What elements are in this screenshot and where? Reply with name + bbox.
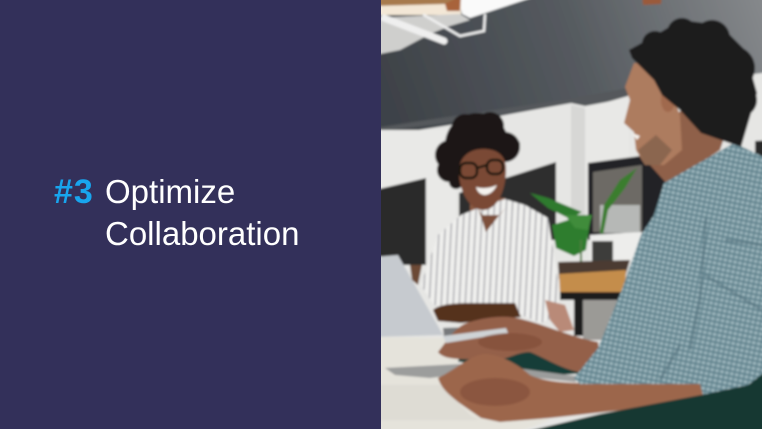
- man: shirt folds: [660, 218, 762, 380]
- photo: two colleagues talking in an office: [375, 0, 762, 429]
- man: smile: [632, 133, 640, 140]
- woman: forearm: [433, 303, 521, 323]
- woman: smile: [476, 185, 497, 195]
- tablet: [385, 363, 576, 382]
- man: curly hair: [629, 18, 757, 147]
- wall pillars: [381, 100, 608, 216]
- laptop: [381, 253, 460, 338]
- windows: [375, 140, 762, 265]
- man: lower forearm and hand: [437, 357, 629, 424]
- man: face: [624, 63, 682, 165]
- panel: navy background: [0, 0, 381, 429]
- man: lower forearm over cuff edge: [580, 382, 704, 398]
- man: knuckle shadows: [460, 333, 542, 406]
- ceiling beam shadow: [375, 88, 628, 132]
- woman: striped shirt: [421, 199, 559, 323]
- man: [438, 18, 762, 422]
- woman: hair: [435, 112, 520, 189]
- heading: #3 Optimize Collaboration: [54, 173, 299, 252]
- acoustic foam: [375, 14, 470, 55]
- man: checked shirt: [574, 143, 762, 405]
- man: ear: [661, 96, 674, 112]
- green sofa back: [457, 350, 580, 376]
- heading line two: Collaboration: [105, 215, 299, 252]
- man: pen: [443, 328, 508, 343]
- woman: [421, 112, 574, 332]
- man: upper forearm and hand: [438, 317, 601, 372]
- man: neck: [650, 109, 724, 183]
- woman: glasses: [460, 160, 503, 178]
- table: [410, 260, 630, 340]
- white trousers: [375, 337, 550, 429]
- woman: face: [459, 149, 506, 210]
- plant: [530, 168, 637, 264]
- skylight: [458, 0, 540, 18]
- heading line one: Optimize: [105, 173, 235, 210]
- heading number: #3: [54, 173, 94, 211]
- office wall: [381, 71, 762, 429]
- white box behind table: [588, 230, 644, 242]
- woman: neckline: [478, 208, 505, 232]
- ceiling light fixture: [375, 0, 662, 15]
- ceiling pipes: [384, 15, 485, 41]
- woman: neck: [468, 196, 506, 212]
- ceiling: [375, 0, 762, 137]
- green sofa foreground: [530, 372, 762, 429]
